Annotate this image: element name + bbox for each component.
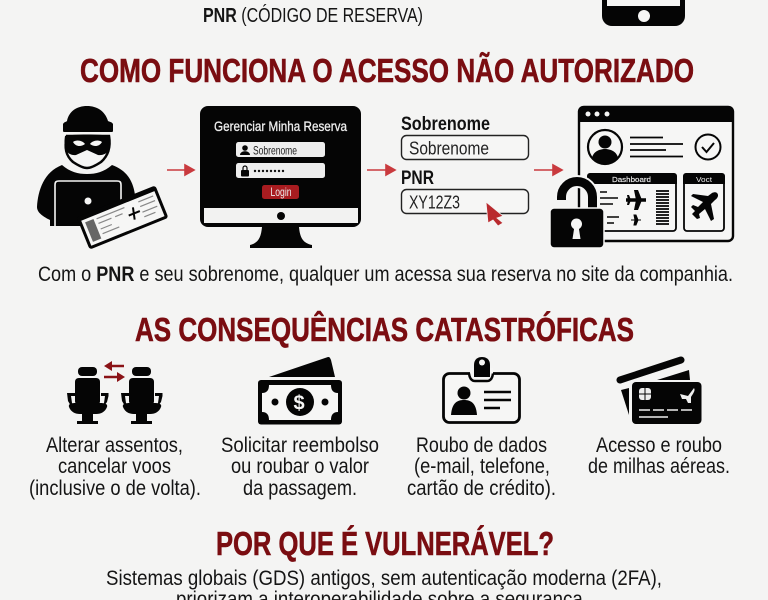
icon: phone bottom [602, 0, 685, 26]
arrow 2 [367, 165, 395, 175]
icon: banknote: $ [294, 392, 305, 414]
dashboard ticket card [587, 173, 677, 231]
dashboard window [578, 106, 734, 241]
text: (e-mail, telefone, [414, 455, 550, 478]
arrow 1 [167, 165, 194, 175]
form: surname and PNR: Sobrenome [409, 138, 489, 158]
hat [63, 106, 113, 132]
text: (inclusive o de volta). [29, 477, 201, 500]
small card with plane: Voct [696, 175, 713, 184]
explanation text [106, 567, 662, 600]
form: surname and PNR: PNR [401, 168, 434, 189]
form: surname and PNR: XY12Z3 [409, 192, 460, 212]
laptop [55, 181, 121, 226]
explanation text: Sistemas globais (GDS) antigos, sem autenticação moderna (2FA), [106, 567, 662, 590]
icon: open padlock [550, 181, 604, 248]
face [66, 136, 110, 168]
text: Alterar assentos, [46, 434, 183, 457]
text: cartão de crédito). [407, 477, 556, 500]
icon: hacker with laptop and ticket [37, 106, 168, 250]
text: Solicitar reembolso [221, 434, 379, 457]
arrow 3 [534, 165, 562, 175]
body [37, 165, 135, 226]
ticket [77, 185, 168, 250]
icon: user avatar [588, 130, 622, 164]
text: ou roubar o valor [231, 455, 369, 478]
surname field: Sobrenome [253, 144, 297, 158]
consequence 1: seats [29, 361, 201, 500]
form: surname and PNR: Sobrenome [401, 114, 490, 135]
heading: consequências: AS CONSEQUÊNCIAS CATASTRÓFICAS [135, 311, 634, 349]
mask [64, 134, 110, 155]
text: de milhas aéreas. [588, 455, 730, 478]
icon: two seats with swap arrows [67, 361, 162, 424]
icon: cards with plane [620, 360, 702, 424]
login button: Login [270, 185, 292, 199]
text: cancelar voos [58, 455, 171, 478]
text: da passagem. [243, 477, 357, 500]
text [221, 434, 379, 500]
top label: PNR: PNR (CÓDIGO DE RESERVA) [203, 4, 423, 27]
form: surname and PNR [401, 114, 528, 226]
icon: red cursor [486, 202, 503, 226]
consequence 2: refund [221, 357, 379, 500]
icon: id badge [444, 357, 520, 422]
heading: por que: POR QUE É VULNERÁVEL? [216, 525, 554, 563]
password field [236, 163, 325, 178]
text: Acesso e roubo [596, 434, 722, 457]
icon: check mark [696, 134, 720, 160]
text: Roubo de dados [416, 434, 547, 457]
consequence 3: data theft [407, 357, 556, 500]
surname field [236, 142, 325, 158]
small card with plane [683, 173, 725, 231]
consequence 4: miles [588, 360, 730, 478]
icon: banknote [258, 357, 342, 424]
monitor: login screen [200, 106, 361, 248]
text [407, 434, 556, 500]
text [588, 434, 730, 478]
text [29, 434, 201, 500]
monitor title: Gerenciar Minha Reserva [214, 118, 347, 134]
dashboard ticket card: Dashboard [612, 175, 651, 184]
